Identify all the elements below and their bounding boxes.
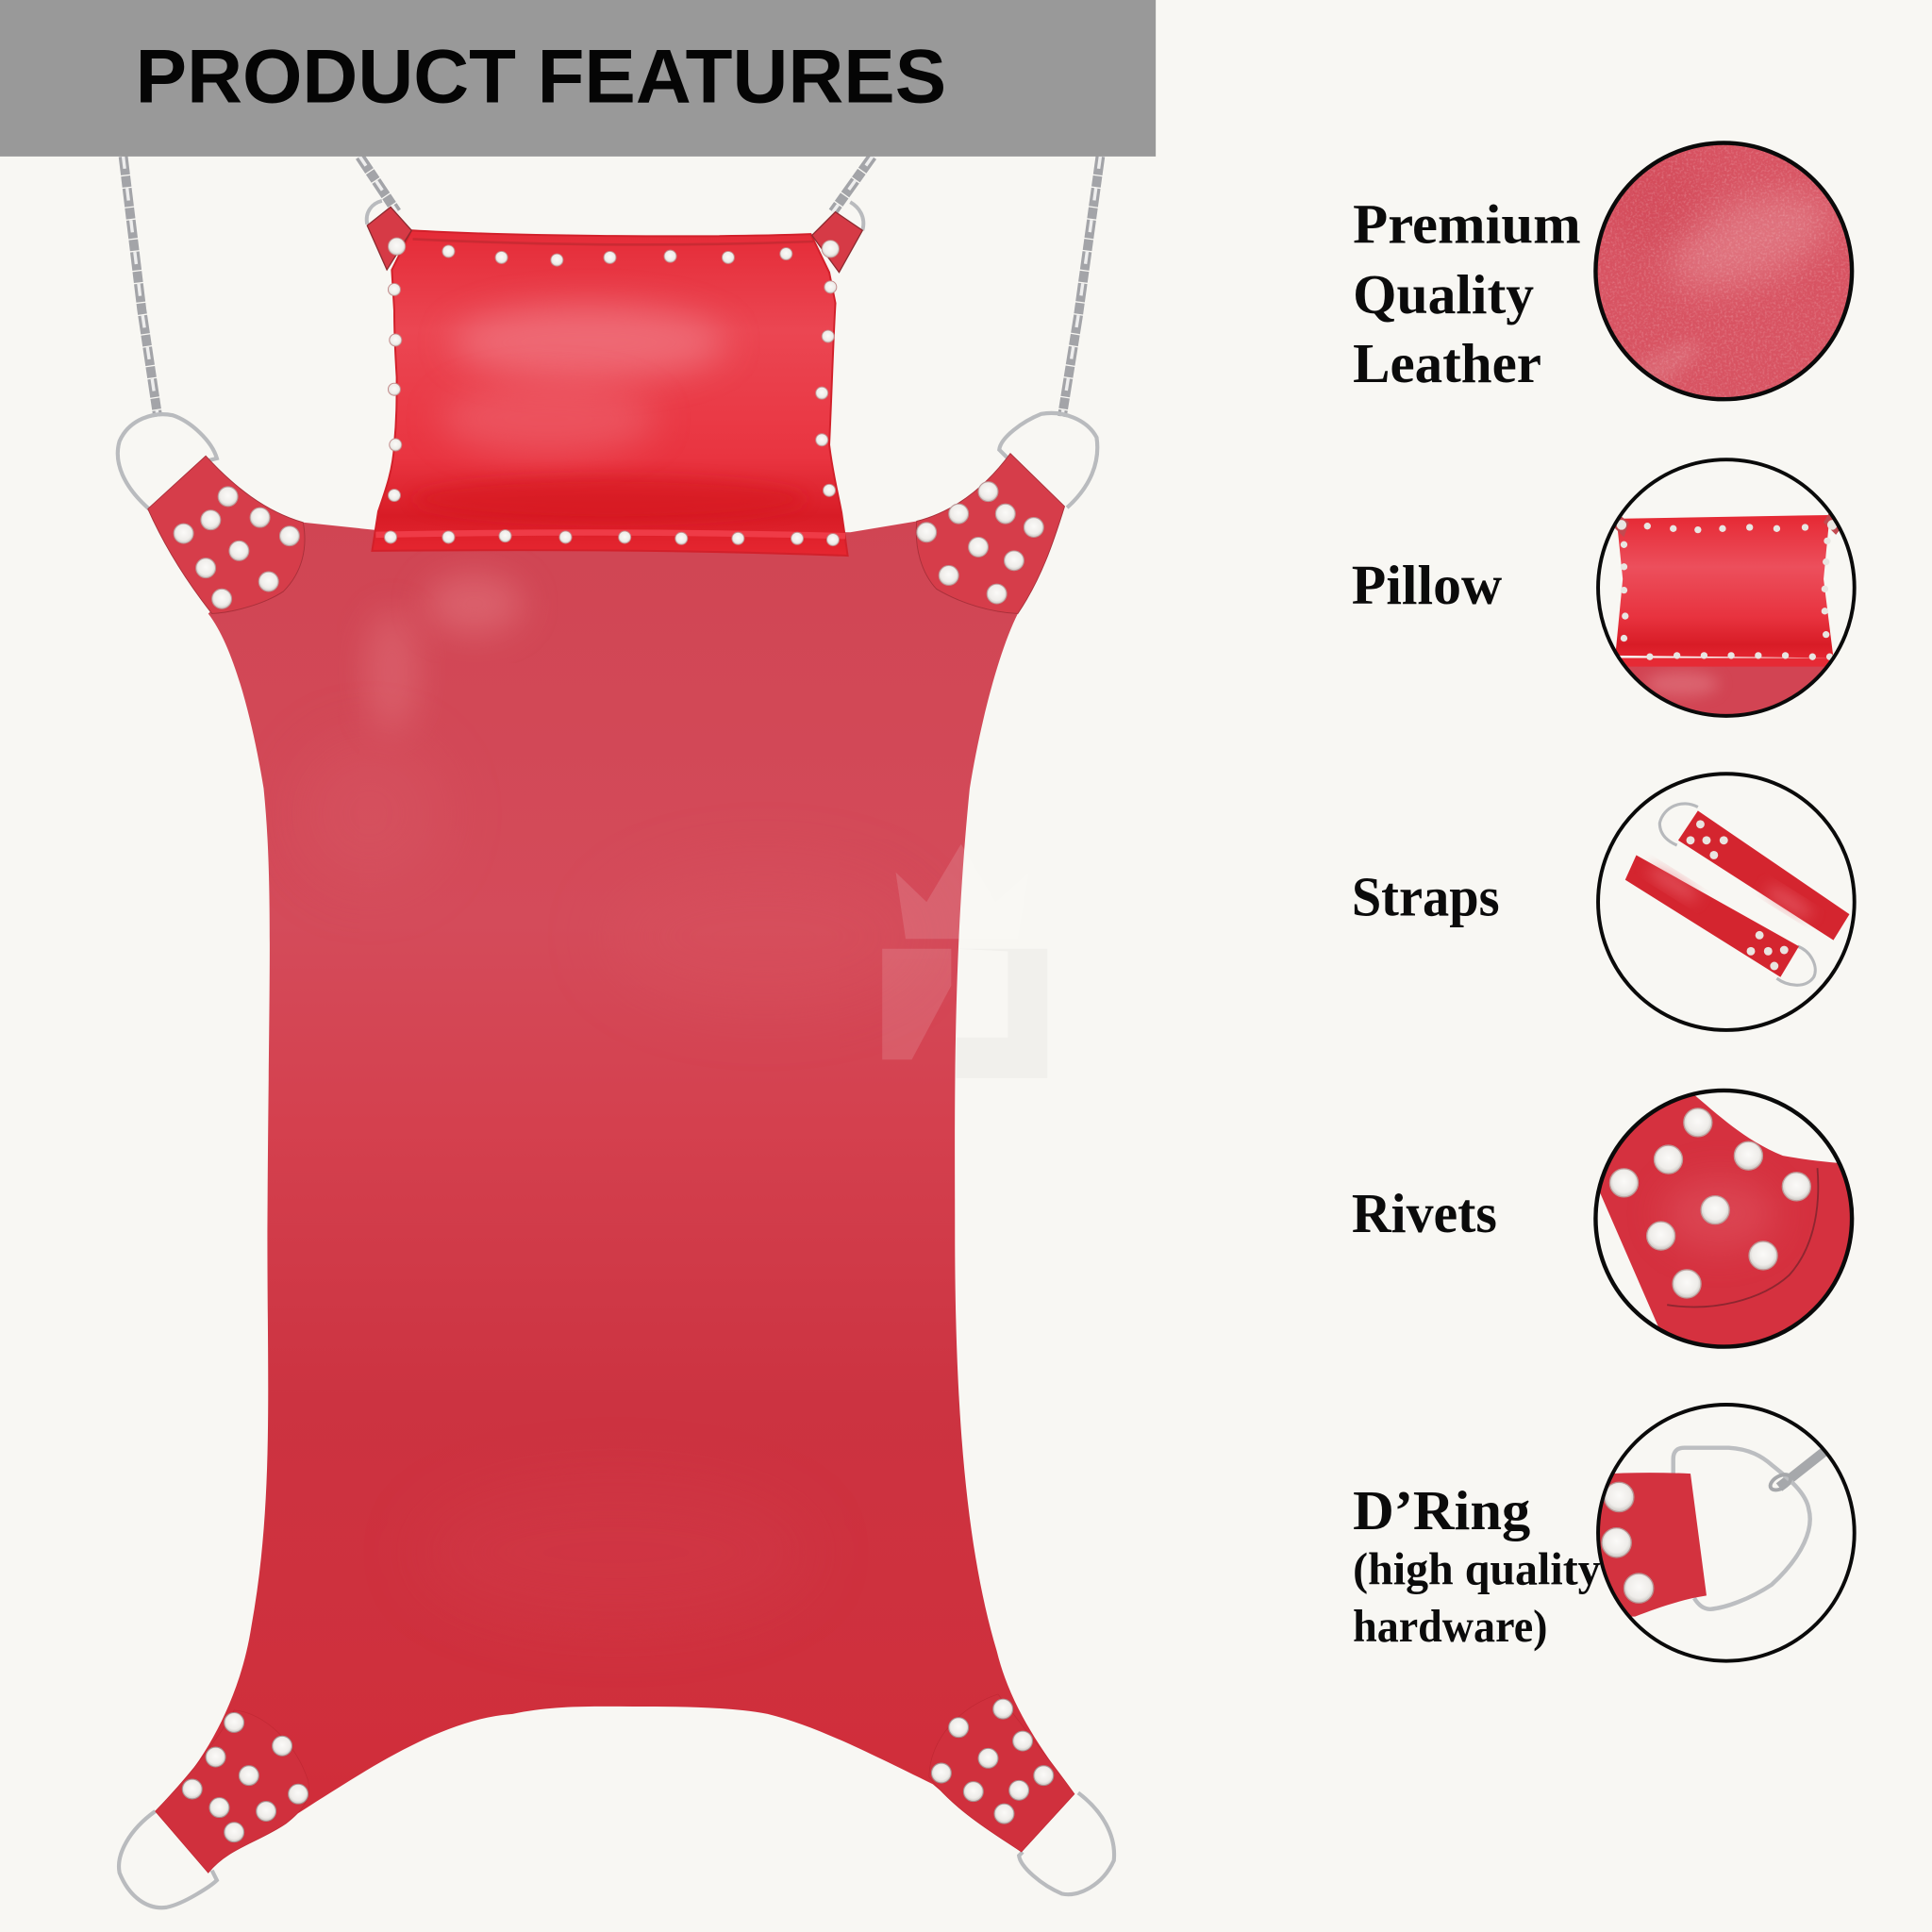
header band [0, 0, 1156, 157]
feature label: rivets: Rivets [1352, 1183, 1497, 1244]
pillow [367, 207, 862, 556]
feature label: premium quality leather: Premium [1353, 193, 1581, 255]
feature label: D-ring, high quality hardware: D’Ring [1353, 1480, 1530, 1541]
pillow rivets [385, 238, 839, 546]
watermark: crown logo [882, 844, 1029, 1059]
pillow corner tabs [367, 207, 862, 273]
chains [124, 157, 1100, 416]
feature label: premium quality leather: Quality [1353, 264, 1534, 325]
feature circle: straps [1598, 774, 1855, 1030]
feature label: premium quality leather [1353, 193, 1581, 394]
feature label: premium quality leather: Leather [1353, 333, 1541, 394]
feature circle: pillow close-up [1590, 459, 1860, 722]
bottom-left corner tab with rivets [156, 1710, 308, 1873]
bottom-right corner tab with rivets [929, 1694, 1074, 1852]
feature label: pillow: Pillow [1352, 555, 1503, 616]
main leather body [156, 521, 1074, 1873]
feature label: D-ring, high quality hardware: (high quality [1353, 1545, 1601, 1595]
feature label: D-ring, high quality hardware [1353, 1480, 1601, 1652]
title: PRODUCT FEATURES [136, 34, 946, 119]
D-rings [118, 201, 1114, 1907]
feature circle: D-ring close-up [1590, 1405, 1855, 1661]
feature label: D-ring, high quality hardware: hardware) [1353, 1602, 1547, 1652]
top-right corner tab with rivets [916, 454, 1064, 613]
product photo: leather sling with chains [118, 157, 1114, 1907]
feature circle: rivets close-up [1593, 1089, 1855, 1349]
top-left corner tab with rivets [148, 456, 305, 613]
feature label: straps: Straps [1352, 866, 1500, 927]
feature circle: leather texture [1590, 136, 1860, 408]
leather highlights [295, 575, 924, 1626]
